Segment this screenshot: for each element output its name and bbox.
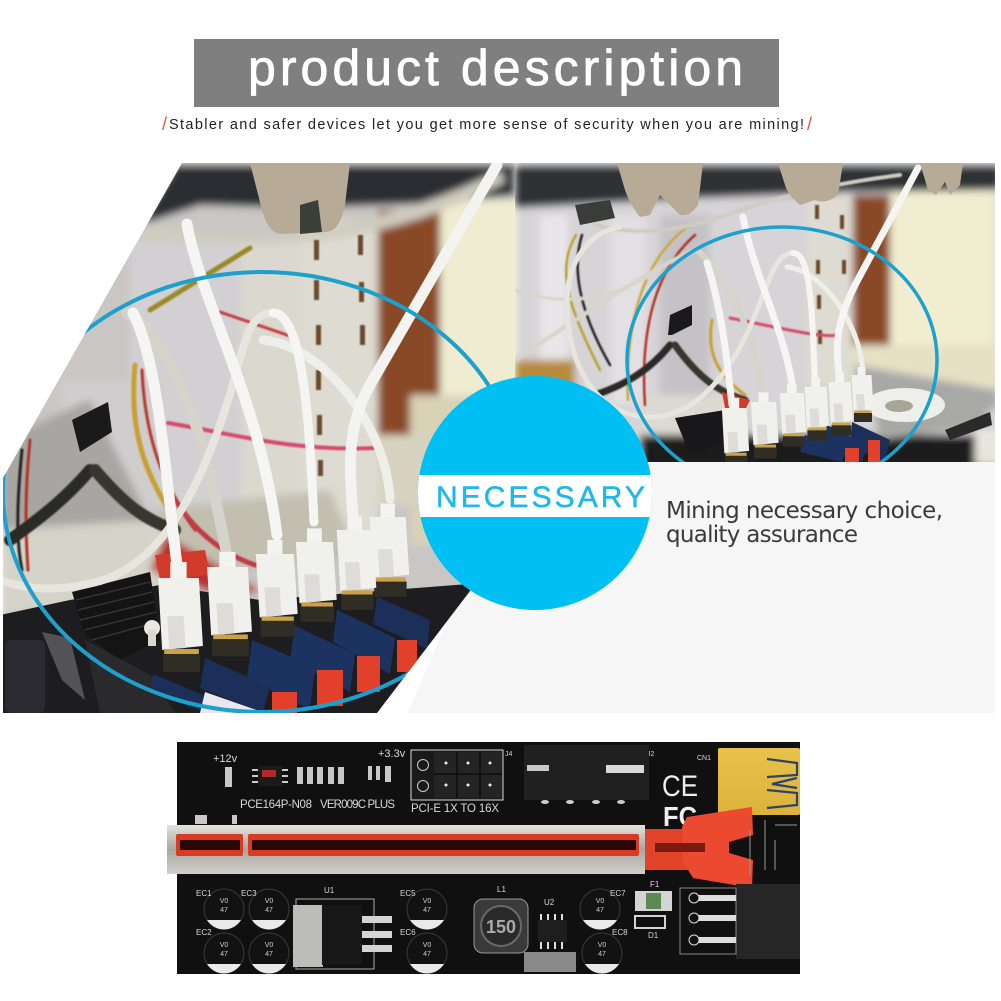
cable highlight ellipse xyxy=(627,227,937,493)
side caption xyxy=(666,498,943,548)
LED and resistor pads xyxy=(195,766,391,824)
CE and FCC marks: CE xyxy=(662,770,698,803)
USB connectors xyxy=(158,503,409,672)
silkscreen labels: VER009C PLUS xyxy=(320,799,395,811)
PCIe bracket xyxy=(250,163,350,234)
CE and FCC marks: FC xyxy=(663,801,697,832)
3-pin power connector xyxy=(680,884,800,959)
USB connectors xyxy=(722,367,874,467)
silkscreen labels: EC7 xyxy=(610,889,626,898)
silkscreen labels: F1 xyxy=(650,880,660,889)
trace coil xyxy=(750,820,797,875)
silkscreen labels: D1 xyxy=(648,931,659,940)
subtitle: / xyxy=(162,114,167,134)
chip U2 xyxy=(524,914,576,972)
icon: black SATA plug xyxy=(668,305,692,335)
side caption: Mining necessary choice, xyxy=(666,498,943,524)
PCIe x16 slot xyxy=(167,825,645,874)
shelf holes xyxy=(314,235,365,476)
silkscreen labels: PCE164P-N08 xyxy=(240,799,312,811)
capacitors xyxy=(204,889,622,973)
icon: black SATA plug xyxy=(72,402,112,452)
silkscreen labels: EC2 xyxy=(196,928,212,937)
J2 molex connector xyxy=(524,745,649,804)
6-pin power connector xyxy=(411,750,503,800)
PCIe brackets xyxy=(617,163,963,217)
inductor L1: 150 xyxy=(486,917,516,937)
silkscreen labels: EC5 xyxy=(400,889,416,898)
chip U3 xyxy=(252,766,288,786)
silkscreen labels: L1 xyxy=(497,885,506,894)
silkscreen labels: EC6 xyxy=(400,928,416,937)
photo: right wide view of rig xyxy=(515,163,995,462)
coloured and grey wires xyxy=(515,175,900,405)
riser cards xyxy=(675,392,890,462)
blurred photo background xyxy=(515,160,1000,470)
subtitle: Stabler and safer devices let you get more sense of security when you are mining! xyxy=(169,117,804,133)
inductor L1 xyxy=(474,899,528,953)
necessary badge: NECESSARY xyxy=(436,481,645,514)
necessary badge xyxy=(418,376,654,610)
silkscreen labels: J4 xyxy=(505,751,512,758)
title banner: product description xyxy=(248,40,743,96)
silkscreen labels: U2 xyxy=(544,898,555,907)
subtitle: / xyxy=(807,114,812,134)
silkscreen labels: +3.3v xyxy=(378,748,406,760)
side caption: quality assurance xyxy=(666,522,858,548)
photo: left close-up of riser cables xyxy=(0,160,521,720)
white USB cables xyxy=(567,168,918,417)
cable highlight ellipse xyxy=(3,272,521,712)
silkscreen labels: PCI-E 1X TO 16X xyxy=(411,803,499,815)
silkscreen labels: EC1 xyxy=(196,889,212,898)
shelf holes xyxy=(815,205,846,344)
silkscreen labels: EC8 xyxy=(612,928,628,937)
regulator U1 xyxy=(293,899,392,969)
silkscreen labels xyxy=(196,748,711,940)
CE and FCC marks xyxy=(662,770,698,832)
USB 3.0 port xyxy=(718,748,800,815)
title banner xyxy=(194,39,779,107)
silkscreen labels: J2 xyxy=(647,751,654,758)
silkscreen labels: +12v xyxy=(213,753,238,765)
product: PCIe riser board xyxy=(167,742,800,974)
hard drive label xyxy=(865,388,992,440)
motherboard and heatsink xyxy=(3,572,470,713)
coloured wires xyxy=(10,248,375,570)
silkscreen labels: EC3 xyxy=(241,889,257,898)
red slot latch xyxy=(645,807,753,888)
fuse and diode xyxy=(635,891,672,928)
grey lower-right panel xyxy=(408,462,995,713)
small module xyxy=(575,200,615,225)
silkscreen labels: U1 xyxy=(324,886,335,895)
silkscreen labels: CN1 xyxy=(697,755,711,762)
blurred photo background xyxy=(0,160,520,720)
riser cards xyxy=(150,550,430,716)
white USB cables xyxy=(3,165,497,589)
